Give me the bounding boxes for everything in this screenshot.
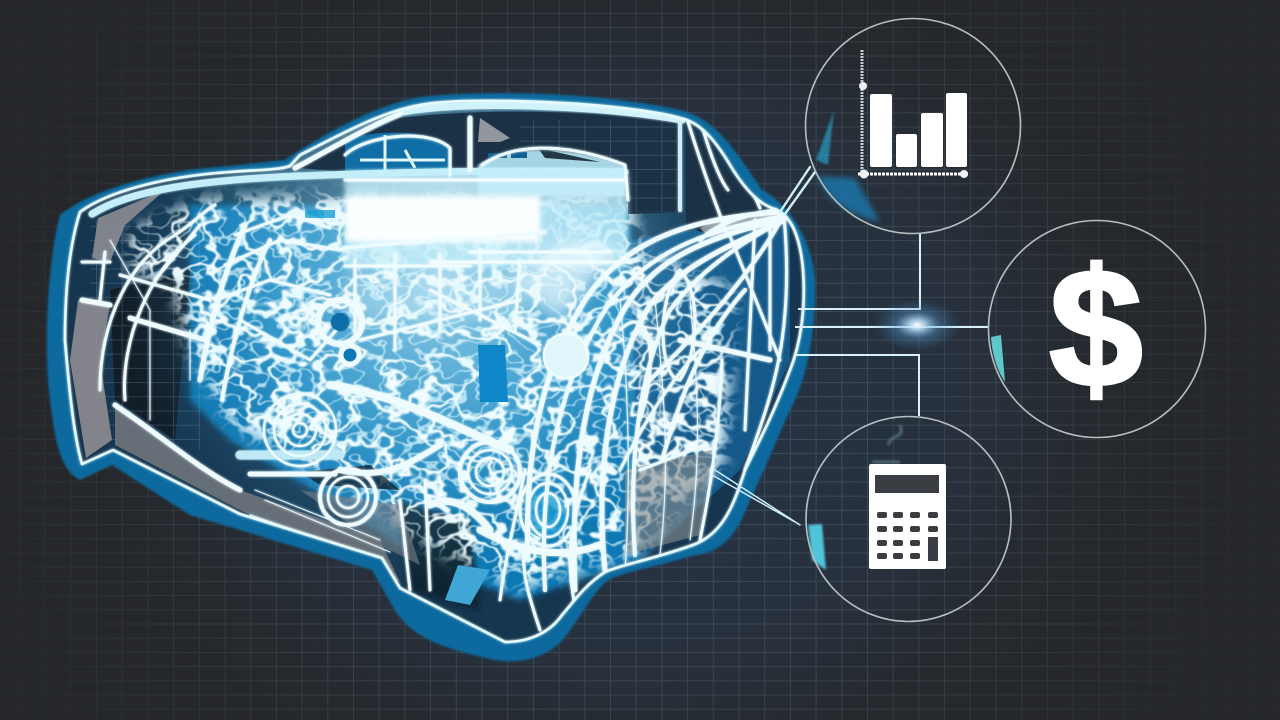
dark body fill	[60, 100, 820, 650]
concentric wheels and pulleys	[264, 300, 588, 546]
car x-ray illustration	[47, 93, 820, 661]
bright accent patches	[300, 210, 568, 605]
engine top cover	[478, 150, 625, 196]
icon circle: calculator	[806, 416, 1011, 622]
grey body panels	[70, 118, 778, 582]
engine glare	[345, 172, 628, 320]
antenna and lead lines from car	[712, 167, 815, 525]
connector lines to icons	[795, 234, 988, 416]
engine bay blue base	[186, 202, 658, 603]
calculator icon	[869, 464, 946, 569]
vein texture	[120, 180, 770, 610]
teal reflection in dollar circle	[991, 335, 1005, 382]
smoke wisp above calculator	[872, 425, 901, 462]
thin outer detail lines	[110, 240, 698, 570]
teal reflection in calculator circle	[808, 524, 826, 570]
roof and main beams	[92, 106, 682, 553]
engine stripes	[345, 180, 630, 266]
white wireframe lines	[82, 106, 787, 630]
dark front compartment	[110, 270, 190, 440]
body structure	[82, 118, 787, 630]
bar chart icon	[858, 50, 968, 178]
dollar sign: $	[1049, 234, 1143, 422]
teal reflections in chart circle	[816, 110, 880, 222]
car body interior	[60, 100, 820, 650]
blue halo around car	[47, 93, 815, 661]
flare at connector junction	[873, 299, 961, 351]
icon circle: bar chart	[806, 18, 1020, 234]
windshield dark area	[300, 112, 680, 214]
car outline	[65, 101, 804, 642]
rear compartment arch	[345, 133, 452, 172]
cyan wash	[144, 102, 704, 576]
icon circle: dollar	[988, 220, 1206, 438]
